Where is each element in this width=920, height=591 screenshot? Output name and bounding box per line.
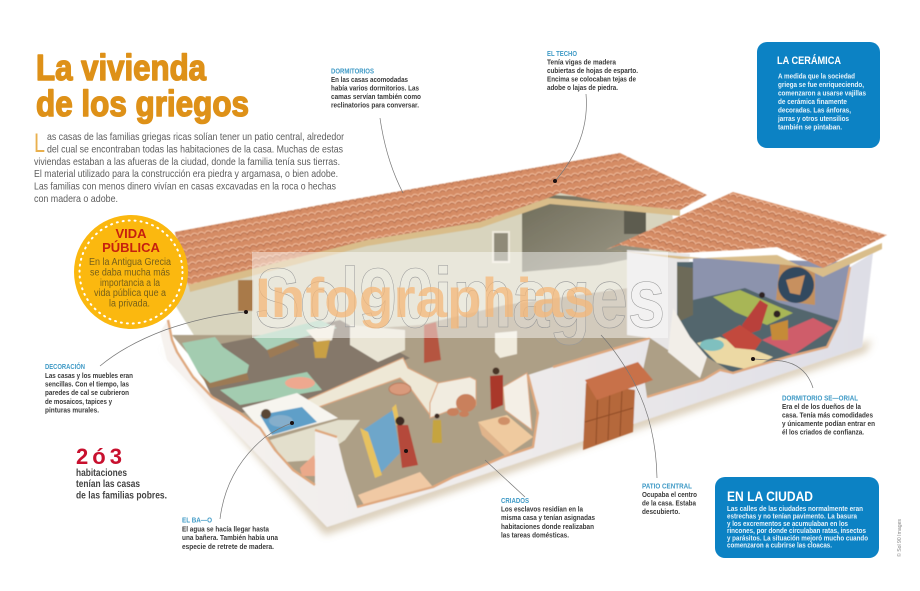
callout: dormitorio señorial: casa. Tenía más comodidades <box>782 410 873 420</box>
back wall <box>172 185 680 345</box>
main roof <box>175 153 707 292</box>
panel: en la ciudad: y parásitos. La situación mejoró mucho cuando <box>727 534 868 542</box>
panel: la cerámica: decoradas. Las ánforas, <box>778 106 851 114</box>
panel: en la ciudad: y los excrementos se acumulaban en los <box>727 519 848 528</box>
wall broken brick edge <box>168 267 850 507</box>
callout: dormitorio señorial <box>782 394 875 436</box>
callout: el baño: especie de retrete de madera. <box>182 542 274 551</box>
statistic: 2 ó 3 habitaciones: 2 ó 3 <box>76 444 122 469</box>
pottery <box>447 394 476 417</box>
green bench 2 <box>253 320 337 358</box>
callout: dormitorios <box>331 66 421 110</box>
intro text block: L <box>34 128 45 158</box>
callout: patio central: de la casa. Estaba <box>642 498 697 508</box>
callout: decoración <box>45 362 133 414</box>
cream mat <box>697 337 773 370</box>
intro text block: as casas de las familias griegas ricas solían tener un patio central, alrededor <box>47 132 344 143</box>
doorway <box>677 266 693 322</box>
wooden door <box>583 362 653 450</box>
callout: dormitorios: En las casas acomodadas <box>331 75 408 84</box>
right roof <box>605 192 887 277</box>
callout: el techo: cubiertas de hojas de esparto. <box>547 66 638 75</box>
statistic: 2 ó 3 habitaciones: tenían las casas <box>76 479 140 490</box>
circle callout: vida pública: En la Antigua Grecia <box>89 257 171 268</box>
callout: patio central: PATIO CENTRAL <box>642 482 693 490</box>
callout: el techo: Encima se colocaban tejas de <box>547 74 636 84</box>
intro text block: del cual se encontraban todas las habitaciones de la casa. Muchas de estas <box>47 144 343 156</box>
callout: dormitorio señorial: DORMITORIO SE—ORIAL <box>782 394 859 402</box>
statistic: 2 ó 3 habitaciones <box>76 444 167 502</box>
callout: dormitorios: camas servían también como <box>331 92 421 101</box>
bench bottom <box>358 472 433 510</box>
patio pedestal <box>495 331 517 358</box>
circle callout: vida pública: importancia a la <box>100 278 160 289</box>
ground shadow <box>160 340 872 535</box>
intro text block: El material utilizado para la construcción era piedra y argamasa, o bien adobe. <box>34 169 338 180</box>
panel: la cerámica: de cerámica finamente <box>778 97 847 106</box>
left room floor <box>190 320 410 413</box>
white couch <box>350 325 405 362</box>
credit: © Sol 90 Images <box>896 518 903 557</box>
callout: el techo <box>547 49 638 92</box>
intro text block: Las familias con menos dinero vivían en casas excavadas en la roca o hechas <box>34 182 336 192</box>
room window <box>493 232 509 262</box>
circle callout: vida pública: la privada. <box>109 298 150 310</box>
callout: el baño <box>182 516 279 551</box>
circle callout: vida pública: vida pública que a <box>94 288 166 299</box>
wooden door on back wall <box>238 280 253 311</box>
panel: en la ciudad: rincones, por donde circulaban ratas, insectos <box>727 526 866 535</box>
intro text block: con madera o adobe. <box>34 194 118 205</box>
green bed <box>713 290 793 325</box>
table <box>478 415 533 460</box>
circle callout: vida pública: se daba mucha más <box>90 268 170 278</box>
statistic: 2 ó 3 habitaciones: habitaciones <box>76 468 127 479</box>
inner cream wall B <box>430 377 476 418</box>
callout: dormitorio señorial: y únicamente podían entrar en <box>782 419 875 428</box>
watermark: Infographias <box>255 266 595 329</box>
loom <box>360 404 400 478</box>
man in red <box>424 322 441 363</box>
callout: decoración: paredes de cal se cubrieron <box>45 388 129 397</box>
callout: el baño: una bañera. También había una <box>182 533 279 542</box>
callout: dormitorios: DORMITORIOS <box>331 66 374 76</box>
woman at loom <box>396 416 418 468</box>
panel: en la ciudad: Las calles de las ciudades normalmente eran <box>727 504 863 513</box>
callout: criados: Los esclavos residían en la <box>501 504 584 514</box>
teal rug <box>700 339 724 351</box>
inner cream wall A <box>300 358 438 415</box>
watermark: Sol90images <box>255 251 665 345</box>
dark room <box>522 195 650 272</box>
title <box>36 47 249 124</box>
callout: el baño: El agua se hacía llegar hasta <box>182 524 270 534</box>
green bench with cushion <box>220 372 322 405</box>
callout: patio central: Ocupaba el centro <box>642 490 697 499</box>
callout: decoración: DECORACIÓN <box>45 362 85 371</box>
circle callout: vida pública: PÚBLICA <box>102 240 160 255</box>
leader dots <box>244 179 755 453</box>
callout: criados: misma casa y tenían asignadas <box>501 513 595 522</box>
panel: en la ciudad: EN LA CIUDAD <box>727 488 813 504</box>
statistic: 2 ó 3 habitaciones: de las familias pobres. <box>76 490 167 502</box>
panel: en la ciudad <box>715 477 879 558</box>
callout: decoración: Las casas y los muebles eran <box>45 371 133 380</box>
callout: el techo: EL TECHO <box>547 49 577 58</box>
bath <box>242 393 338 437</box>
callout: el techo: Tenía vigas de madera <box>547 58 617 66</box>
white panel beside bedroom <box>668 308 707 378</box>
callout: dormitorio señorial: él los criados de confianza. <box>782 428 864 436</box>
panel: la cerámica: también se pintaban. <box>778 122 842 132</box>
medallion <box>776 262 815 305</box>
workroom wall C <box>503 373 532 430</box>
panel: la cerámica: comenzaron a usarse vajillas <box>778 88 866 98</box>
title: La vivienda <box>36 47 207 88</box>
callout: dormitorios: había varios dormitorios. Las <box>331 84 419 92</box>
callout: patio central: descubierto. <box>642 507 680 516</box>
panel: la cerámica: jarras y otros utensilios <box>777 114 849 123</box>
panel: la cerámica: griega se fue enriqueciendo, <box>778 80 864 89</box>
servant in red <box>490 368 503 410</box>
callout: criados: habitaciones donde realizaban <box>501 522 594 531</box>
panel: en la ciudad: estrechas y no tenían pavimento. La basura <box>727 512 858 520</box>
callout: decoración: pinturas murales. <box>45 406 99 414</box>
callout: decoración: de mosaicos, tapices y <box>45 397 113 406</box>
figures <box>306 322 503 468</box>
storage wall <box>270 420 360 462</box>
callout: criados: las tareas domésticas. <box>501 530 569 540</box>
master bedroom <box>677 258 850 373</box>
callout: el techo: adobe o lajas de piedra. <box>547 83 618 92</box>
callout: el baño: EL BA—O <box>182 516 212 524</box>
amphora <box>300 455 318 476</box>
callout: criados: CRIADOS <box>501 496 529 505</box>
callout: dormitorios: reclinatorios para conversar. <box>331 100 419 110</box>
callout: dormitorio señorial: Era el de los dueños de la <box>782 402 862 411</box>
circle callout: vida pública: VIDA <box>115 226 147 241</box>
diners <box>722 292 788 350</box>
panel: en la ciudad: comenzaron a cubrirse las cloacas. <box>727 540 832 550</box>
circle callout: vida pública <box>74 215 188 329</box>
floor <box>172 285 860 520</box>
white column between patio and bedroom <box>627 250 690 350</box>
child in yellow <box>432 414 442 443</box>
intro text block <box>34 128 344 205</box>
lattice <box>624 208 646 234</box>
front wall <box>160 253 873 527</box>
round dish <box>389 383 411 395</box>
panel: la cerámica: A medida que la sociedad <box>778 72 855 80</box>
callout: criados <box>501 496 595 540</box>
intro text block: viviendas estaban a las afueras de la ciudad, donde la familia tenía sus tierras. <box>34 157 340 168</box>
purple wall <box>693 258 850 322</box>
leader lines <box>100 94 813 519</box>
pink bed <box>762 318 833 355</box>
panel: la cerámica <box>757 42 880 148</box>
man with yellow skirt <box>306 325 335 358</box>
callout: decoración: sencillas. Con el tiempo, las <box>45 380 129 388</box>
title: de los griegos <box>36 83 249 124</box>
panel: la cerámica: LA CERÁMICA <box>777 54 841 67</box>
green bench 1 <box>182 337 249 388</box>
callout: patio central <box>642 482 697 516</box>
illustration: cutaway of greek house <box>160 153 887 535</box>
